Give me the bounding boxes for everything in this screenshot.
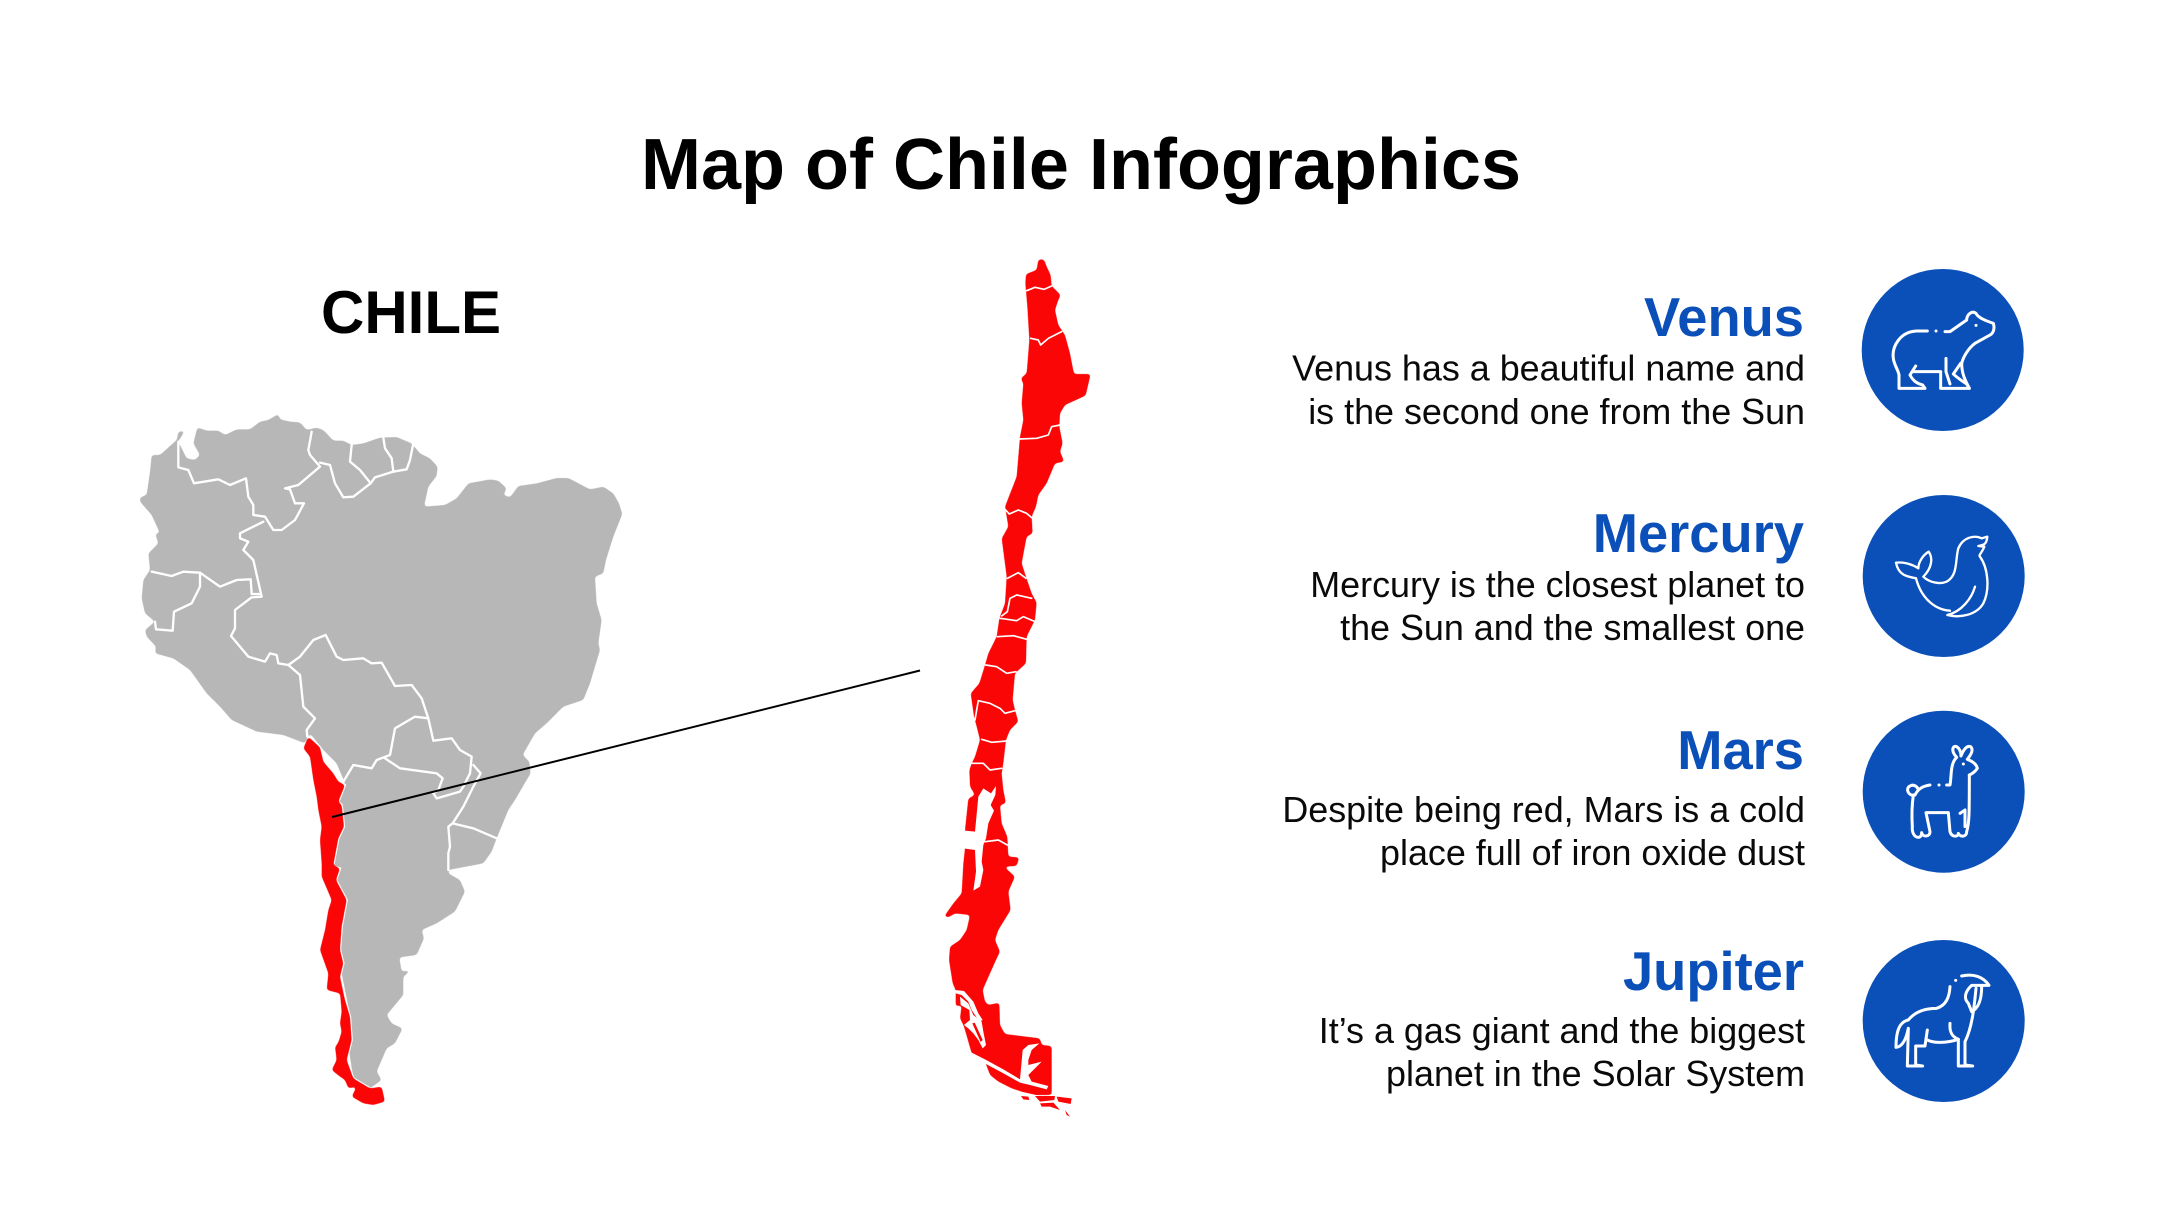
- northern Patagonia gulf and fjord: [953, 786, 996, 891]
- Chile highlighted on the continent: [303, 737, 385, 1105]
- southern channels: [955, 990, 1048, 1089]
- text: Mars description: place full of iron oxide dust: [1380, 833, 1805, 873]
- title: Map of Chile Infographics: [641, 125, 1521, 205]
- text: Mercury description: Mercury is the closest planet to: [1310, 565, 1805, 605]
- landmass: South America: [140, 414, 622, 1088]
- connector line: [332, 670, 920, 817]
- Chile territory: [944, 259, 1091, 1095]
- heading: Venus: Venus: [1644, 287, 1804, 348]
- heading: Jupiter: Jupiter: [1623, 941, 1804, 1002]
- item: Venus: [1292, 269, 2024, 432]
- heading: CHILE: CHILE: [321, 279, 501, 346]
- icon: llama: [1863, 711, 2025, 873]
- text: Jupiter description: It’s a gas giant and the biggest: [1319, 1011, 1805, 1051]
- heading: Mars: Mars: [1677, 720, 1804, 781]
- icon: seal: [1863, 495, 2025, 657]
- item: Mercury: [1310, 495, 2025, 657]
- icon: goat: [1863, 940, 2025, 1102]
- heading: Mercury: Mercury: [1593, 503, 1804, 564]
- text: Mars description: Despite being red, Mars is a cold: [1282, 790, 1805, 830]
- channel islets: [972, 1023, 1072, 1117]
- icon: bear: [1862, 269, 2024, 431]
- item: Jupiter: [1319, 940, 2025, 1102]
- country borders: [152, 432, 497, 1088]
- text: Mercury description: the Sun and the smallest one: [1340, 608, 1805, 648]
- text: Venus description: Venus has a beautiful name and: [1292, 348, 1805, 388]
- region boundaries: [972, 286, 1062, 845]
- map: South America with Chile highlighted: [140, 414, 622, 1105]
- text: Jupiter description: planet in the Solar System: [1386, 1054, 1805, 1094]
- item: Mars: [1282, 711, 2025, 873]
- text: Venus description: is the second one from the Sun: [1308, 392, 1805, 432]
- map: detailed Chile regions: [944, 259, 1091, 1117]
